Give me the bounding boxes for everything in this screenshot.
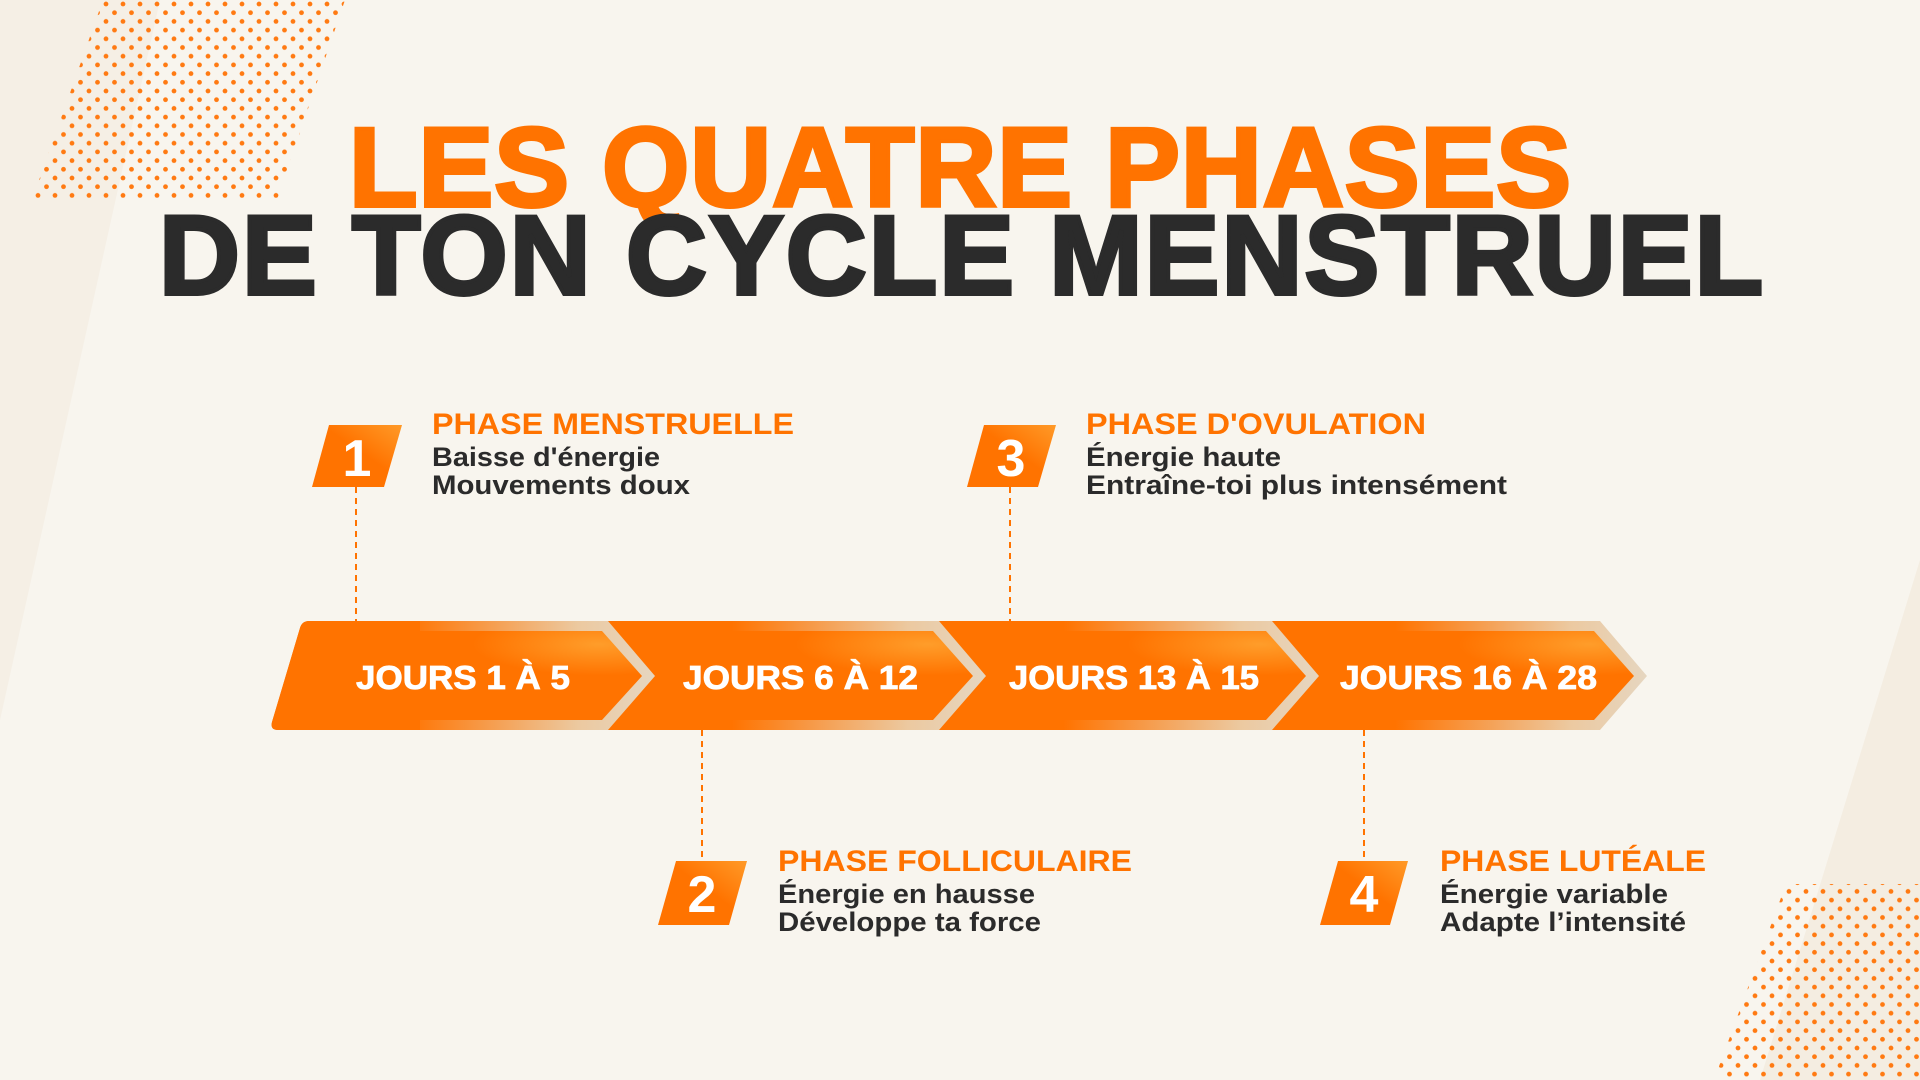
phase 2 text xyxy=(778,845,1132,937)
phase 3 text: PHASE D'OVULATION xyxy=(1086,408,1426,441)
phase 3 badge: 3 xyxy=(997,430,1025,488)
title: DE TON CYCLE MENSTRUEL xyxy=(159,193,1763,318)
segment 3 xyxy=(926,621,1319,730)
phase 4 text: Énergie variable xyxy=(1440,878,1668,909)
timeline bar xyxy=(272,621,1647,730)
phase 4 text xyxy=(1440,844,1706,937)
segment 1 xyxy=(272,621,655,730)
phase 2 text: Développe ta force xyxy=(778,907,1041,937)
phase 4 text: Adapte l’intensité xyxy=(1440,907,1686,937)
phase 2 text: Énergie en hausse xyxy=(778,878,1035,909)
phase 1 text: Baisse d'énergie xyxy=(432,442,660,472)
phase 3 text xyxy=(1086,408,1507,500)
phase 2 badge: 2 xyxy=(688,866,716,924)
segment 1: JOURS 1 À 5 xyxy=(356,659,570,696)
title: LES QUATRE PHASES xyxy=(349,105,1573,230)
phase 4 text: PHASE LUTÉALE xyxy=(1440,844,1706,878)
phase 1 badge: 1 xyxy=(343,430,371,488)
phase 4 badge xyxy=(1320,861,1408,925)
title xyxy=(159,105,1763,318)
phase 3 text: Énergie haute xyxy=(1086,441,1281,472)
dashed connectors xyxy=(356,487,1364,861)
segment 4: JOURS 16 À 28 xyxy=(1340,659,1597,696)
phase 4 badge: 4 xyxy=(1350,866,1379,924)
phase 2 badge xyxy=(658,861,747,925)
dot pattern top-left xyxy=(32,0,345,200)
phase 1 text xyxy=(432,408,794,500)
phase 1 badge xyxy=(312,425,402,488)
phase 3 text: Entraîne-toi plus intensément xyxy=(1086,470,1507,500)
phase 1 text: Mouvements doux xyxy=(432,470,690,500)
phase 2 text: PHASE FOLLICULAIRE xyxy=(778,845,1132,878)
phase 1 text: PHASE MENSTRUELLE xyxy=(432,408,794,441)
phase 3 badge xyxy=(967,425,1056,488)
dot pattern bottom-right xyxy=(1714,884,1920,1080)
segment 2: JOURS 6 À 12 xyxy=(683,659,918,696)
segment 4 xyxy=(1260,621,1647,730)
segment 2 xyxy=(595,621,986,730)
segment 3: JOURS 13 À 15 xyxy=(1009,659,1259,696)
